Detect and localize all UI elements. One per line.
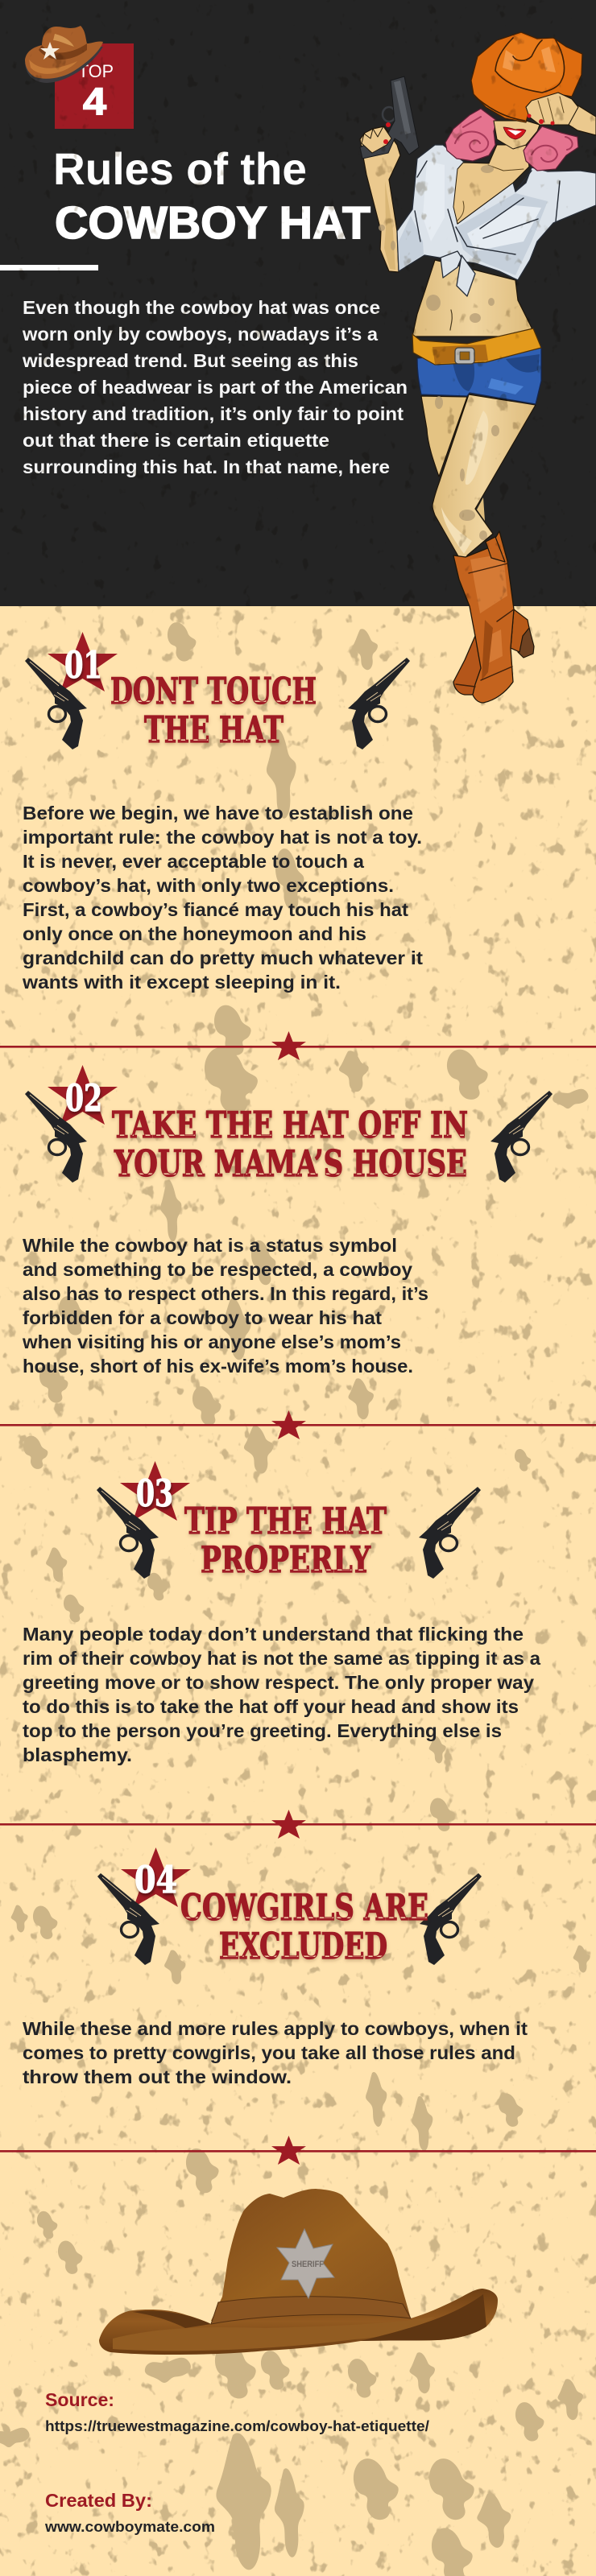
- intro text: piece of headwear is part of the American: [23, 377, 408, 398]
- body text: grandchild can do pretty much whatever it: [23, 947, 423, 968]
- body text: While these and more rules apply to cowboys, when it: [23, 2018, 528, 2039]
- heading: THE HAT: [144, 708, 284, 751]
- section 4: Cowgirls are excluded: [23, 1847, 528, 2087]
- badge: red square with TOP 4: 4: [83, 80, 106, 122]
- heading: YOUR MAMA’S HOUSE: [114, 1142, 467, 1185]
- shorts: [417, 346, 541, 404]
- intro text: worn only by cowboys, nowadays it’s a: [22, 324, 379, 345]
- badge: red square with TOP 4: TOP: [78, 61, 114, 81]
- body text: Many people today don’t understand that flicking the: [23, 1624, 524, 1645]
- orange hat: [471, 32, 582, 122]
- body text: only once on the honeymoon and his: [23, 923, 366, 944]
- icon: number star: [48, 632, 118, 691]
- intro text: out that there is certain etiquette: [23, 430, 329, 451]
- heading: DONT TOUCH: [110, 670, 317, 712]
- grunge spots on figure: [379, 165, 499, 540]
- heading: COWGIRLS ARE: [180, 1886, 428, 1929]
- icon: right revolver: [348, 658, 410, 749]
- band: [211, 2297, 411, 2324]
- body text: Before we begin, we have to establish one: [23, 803, 413, 824]
- body text: [23, 2018, 528, 2087]
- shirt knot tails: [441, 251, 475, 296]
- icon: right revolver: [420, 1873, 482, 1965]
- illustration: brown sheriff hat: [99, 2189, 498, 2355]
- face: [494, 121, 540, 149]
- body text: comes to pretty cowgirls, you take all those rules and: [23, 2042, 515, 2063]
- sheriff badge: SHERIFF: [292, 2260, 324, 2269]
- rear leg: [421, 396, 467, 477]
- icon: small cowboy hat with star: [25, 26, 103, 83]
- heading: TIP THE HAT: [184, 1500, 387, 1542]
- divider: white bar: [0, 265, 98, 270]
- heading: PROPERLY: [201, 1538, 371, 1581]
- body text: First, a cowboy’s fiancé may touch his hat: [23, 899, 408, 920]
- body text: blasphemy.: [23, 1744, 132, 1765]
- intro text: surrounding this hat. In that name, here: [23, 456, 390, 477]
- heading: [184, 1500, 387, 1581]
- number 01: 01: [64, 643, 102, 687]
- icon: number star: [121, 1847, 191, 1907]
- header panel: dark background: [0, 0, 596, 606]
- section 1: Dont touch the hat: [22, 632, 423, 993]
- body text: when visiting his or anyone else’s mom’s: [22, 1331, 401, 1352]
- body text: rim of their cowboy hat is not the same as tipping it as a: [23, 1648, 541, 1669]
- page background: cream paper: [0, 606, 596, 2576]
- illustration: cowgirl with pistol: [360, 32, 596, 703]
- number 04: 04: [135, 1858, 177, 1901]
- icon: number star: [48, 1065, 118, 1125]
- heading: [110, 670, 317, 751]
- creator credit: [44, 2490, 215, 2535]
- front leg: [433, 394, 536, 568]
- source credit: Source:: [45, 2389, 114, 2410]
- icon: right revolver: [419, 1487, 481, 1579]
- intro text: Even though the cowboy hat was once: [23, 297, 380, 318]
- source credit: https://truewestmagazine.com/cowboy-hat-etiquette/: [45, 2418, 429, 2434]
- boots: [453, 531, 534, 703]
- hair: [445, 109, 578, 171]
- intro text: [22, 297, 408, 477]
- divider with star: [0, 2136, 596, 2165]
- body text: house, short of his ex-wife’s mom’s house.: [23, 1356, 413, 1377]
- number 02: 02: [65, 1076, 102, 1120]
- icon: right revolver: [490, 1091, 553, 1183]
- creator credit: www.cowboymate.com: [44, 2519, 215, 2535]
- heading: Rules of the Cowboy Hat: [53, 143, 370, 249]
- left arm and hand: [360, 126, 400, 272]
- heading: [180, 1886, 428, 1967]
- brim: [99, 2289, 498, 2355]
- icon: left revolver: [25, 658, 87, 749]
- divider with star: [0, 1410, 596, 1439]
- heading: Rules of the Cowboy Hat: COWBOY HAT: [55, 197, 370, 249]
- icon: left revolver: [97, 1873, 159, 1965]
- neck and chest: [453, 145, 529, 224]
- body text: throw them out the window.: [23, 2066, 292, 2087]
- badge: red square with TOP 4: [55, 43, 134, 129]
- body text: and something to be respected, a cowboy: [23, 1259, 412, 1280]
- body text: greeting move or to show respect. The only proper way: [23, 1672, 534, 1693]
- section 2: Take the hat off: [22, 1065, 553, 1377]
- body text: also has to respect others. In this regard, it’s: [23, 1283, 428, 1304]
- shirt: [397, 145, 596, 280]
- body text: top to the person you’re greeting. Everything else is: [23, 1720, 502, 1741]
- body text: wants with it except sleeping in it.: [22, 972, 341, 993]
- divider with star: [0, 1810, 596, 1839]
- heading: [112, 1104, 468, 1185]
- creator credit: Created By:: [45, 2490, 152, 2511]
- pistol: [360, 76, 419, 159]
- sheriff badge: [277, 2229, 334, 2298]
- body text: While the cowboy hat is a status symbol: [23, 1235, 397, 1256]
- source credit: [45, 2389, 429, 2434]
- number 03: 03: [136, 1472, 173, 1515]
- raised right arm: [569, 105, 596, 135]
- crown: [211, 2189, 411, 2330]
- heading: EXCLUDED: [219, 1925, 387, 1967]
- divider with star: [0, 1031, 596, 1060]
- body text: cowboy’s hat, with only two exceptions.: [23, 875, 394, 896]
- belt: [412, 328, 541, 365]
- intro text: history and tradition, it’s only fair to point: [23, 403, 404, 424]
- body text: [23, 1624, 541, 1765]
- icon: left revolver: [97, 1487, 159, 1579]
- header title block: [53, 43, 370, 249]
- intro text: widespread trend. But seeing as this: [22, 350, 358, 371]
- header grunge overlay: [0, 0, 596, 606]
- body text: [22, 1235, 428, 1377]
- heading: TAKE THE HAT OFF IN: [112, 1104, 468, 1146]
- body text: [22, 803, 423, 993]
- section 3: Tip the hat properly: [23, 1461, 541, 1765]
- lips: [503, 127, 526, 139]
- body text: to do this is to take the hat off your head and show its: [23, 1696, 519, 1717]
- body text: forbidden for a cowboy to wear his hat: [23, 1307, 382, 1328]
- torso: [412, 260, 533, 336]
- heading: Rules of the Cowboy Hat: Rules of the: [53, 143, 307, 194]
- icon: left revolver: [25, 1091, 87, 1183]
- body text: It is never, ever acceptable to touch a: [23, 851, 365, 872]
- hand over hat: [526, 93, 578, 126]
- icon: number star: [120, 1461, 190, 1521]
- body text: important rule: the cowboy hat is not a toy.: [23, 827, 422, 848]
